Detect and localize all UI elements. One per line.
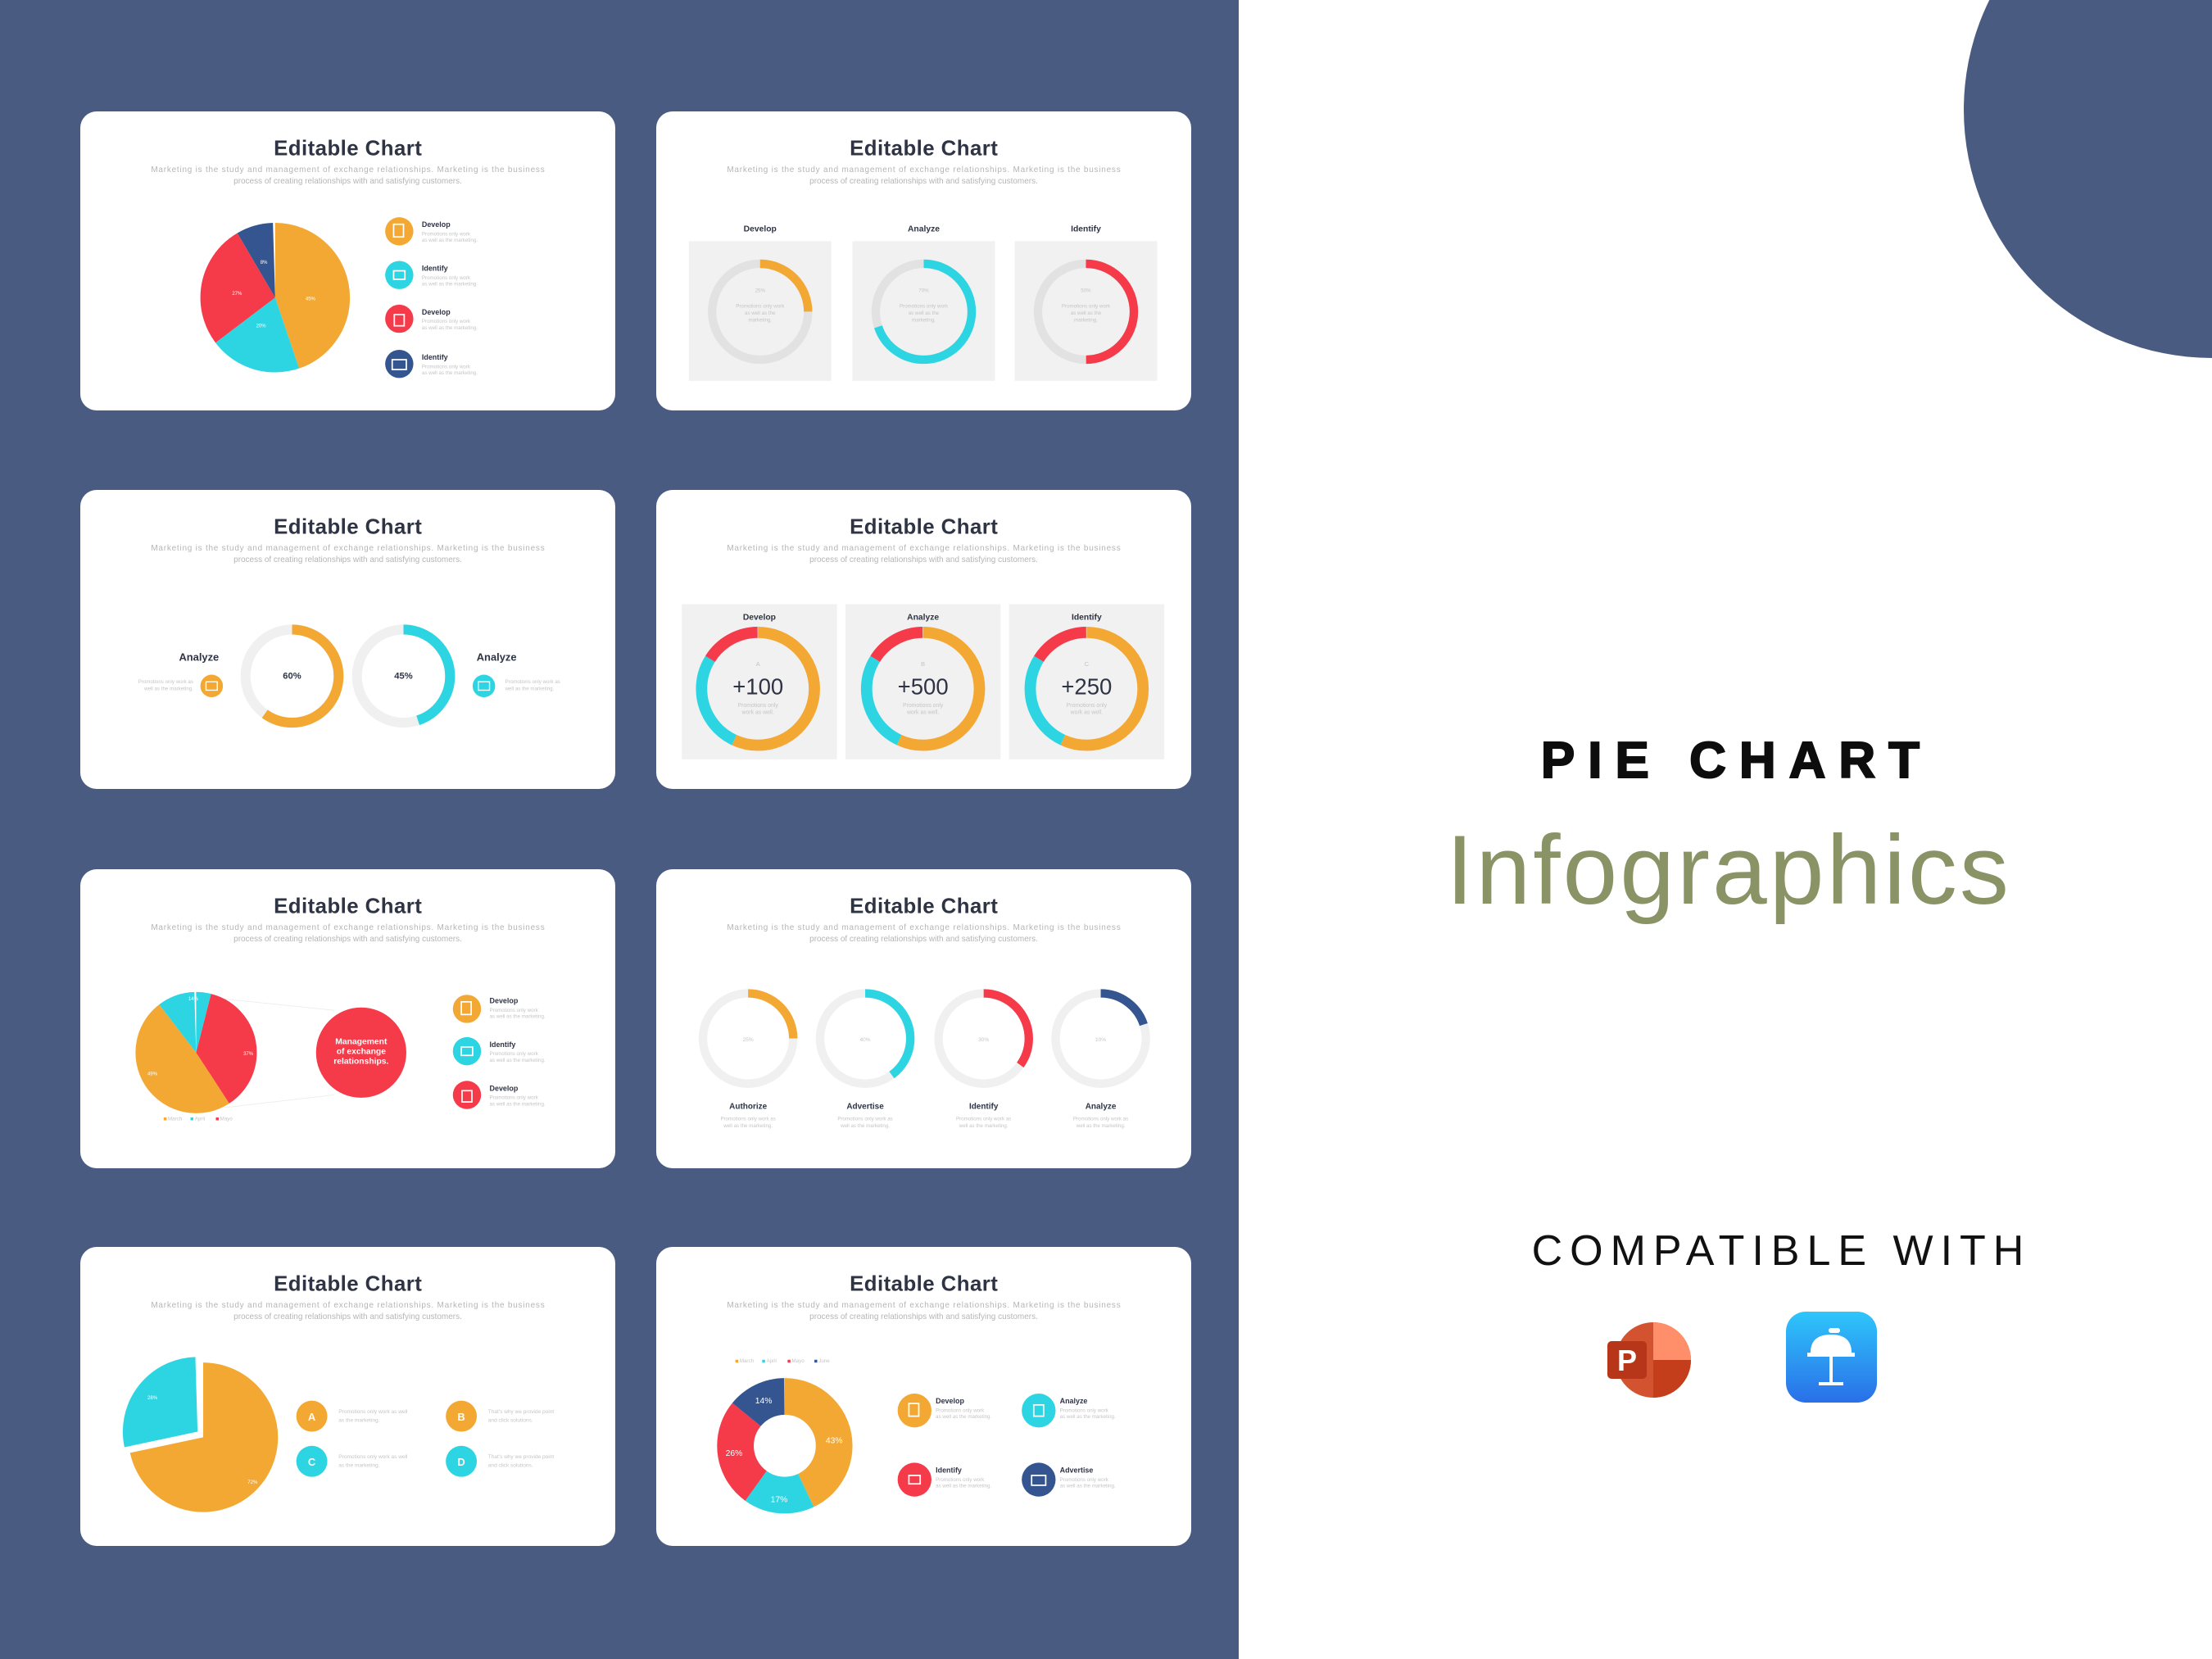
legend: Identify xyxy=(422,353,448,361)
card 5: pie with callout circle: 49% xyxy=(147,1072,158,1077)
legend: Promotions only work xyxy=(422,232,471,238)
card 8: donut with four legend items: 43% xyxy=(826,1436,843,1445)
card 1: pie chart with legend: 45% xyxy=(306,297,316,302)
card 5: pie with callout circle: Develop xyxy=(490,1084,519,1092)
card 6: four small donuts: Authorize xyxy=(729,1103,768,1112)
card 5: pie with callout circle: Promotions only work xyxy=(490,1095,539,1101)
card 2: three single-value donuts in grey boxes: Promotions only work xyxy=(736,303,785,309)
legend: Promotions only work xyxy=(422,275,471,281)
card 1: pie chart with legend: process of creating relationships with and satisfying customers. xyxy=(233,177,462,186)
card 5: pie with callout circle: Promotions only work xyxy=(490,1008,539,1013)
card 4: three multi-segment donuts with numbers: Identify xyxy=(1072,613,1102,622)
card 2: three single-value donuts in grey boxes: 50% xyxy=(1081,288,1091,293)
card 2: three single-value donuts in grey boxes: 70% xyxy=(918,288,929,293)
heading: PIE CHART: PIE CHART xyxy=(1541,732,1933,789)
card 7: exploded pie with A-D list: process of creating relationships with and satisfying customers. xyxy=(233,1312,462,1321)
card 8: donut with four legend items: 17% xyxy=(771,1496,787,1505)
card 5: pie with callout circle: 37% xyxy=(243,1052,254,1057)
card 8: donut with four legend items: as well as the marketing. xyxy=(1060,1484,1116,1489)
card 7: exploded pie with A-D list: That's why we provide point xyxy=(488,1454,554,1460)
card 3: two percentage donuts: 45% xyxy=(394,672,413,682)
card 8: donut with four legend items: as well as the marketing. xyxy=(936,1484,992,1489)
legend: as well as the marketing. xyxy=(422,238,478,243)
card 7: exploded pie with A-D list: A xyxy=(308,1411,315,1423)
card 8: donut with four legend items: March xyxy=(740,1358,755,1364)
card 6: four small donuts: 30% xyxy=(978,1037,989,1043)
card 6: four small donuts: Promotions only work as xyxy=(720,1116,776,1122)
card 3: two percentage donuts: Promotions only work as xyxy=(505,679,560,685)
card 8: donut with four legend items: process of creating relationships with and satisfying customers. xyxy=(809,1312,1038,1321)
card 7: exploded pie with A-D list: B xyxy=(457,1411,465,1423)
card 2: three single-value donuts in grey boxes: Analyze xyxy=(908,224,940,233)
card 5: pie with callout circle: April xyxy=(195,1116,205,1122)
card 5: pie with callout circle: Promotions only work xyxy=(490,1051,539,1057)
card 6: four small donuts: Promotions only work as xyxy=(837,1116,893,1122)
card 8: donut with four legend items: April xyxy=(767,1358,777,1364)
card 6: four small donuts: well as the marketing. xyxy=(959,1123,1009,1129)
card 5: pie with callout circle: March xyxy=(168,1116,183,1122)
card 1: pie chart with legend: 20% xyxy=(256,324,266,329)
legend: Identify xyxy=(422,265,448,273)
card 5: pie with callout circle xyxy=(80,869,615,1168)
card 2: three single-value donuts in grey boxes: marketing. xyxy=(1074,318,1098,324)
card 8: donut with four legend items: Promotions only work xyxy=(1060,1407,1109,1413)
legend: Promotions only work xyxy=(422,364,471,369)
icon: PowerPoint: P xyxy=(1617,1344,1637,1377)
card 8: donut with four legend items: Promotions only work xyxy=(1060,1477,1109,1483)
card 2: three single-value donuts in grey boxes: marketing. xyxy=(748,318,773,324)
card 2: three single-value donuts in grey boxes: Promotions only work xyxy=(1062,303,1111,309)
card 2: three single-value donuts in grey boxes: as well as the xyxy=(1071,310,1102,316)
card 5: pie with callout circle: as well as the marketing. xyxy=(490,1101,546,1107)
card 4: three multi-segment donuts with numbers: Promotions only xyxy=(738,703,778,709)
card 8: donut with four legend items: Advertise xyxy=(1060,1466,1093,1474)
card 5: pie with callout circle: Marketing is the study and management of exchange relationships. Marketing is the business xyxy=(151,923,545,932)
card 2: three single-value donuts in grey boxes: as well as the xyxy=(745,310,776,316)
card 8: donut with four legend items: Promotions only work xyxy=(936,1477,985,1483)
card 4: three multi-segment donuts with numbers: work as well. xyxy=(741,710,774,716)
card 4: three multi-segment donuts with numbers: Analyze xyxy=(907,613,939,622)
card 4: three multi-segment donuts with numbers: Marketing is the study and management of exchange relationships. Marketing is the business xyxy=(727,544,1121,553)
card 8: donut with four legend items: June xyxy=(818,1358,830,1364)
card 6: four small donuts: process of creating relationships with and satisfying customers. xyxy=(809,935,1038,944)
legend: as well as the marketing. xyxy=(422,370,478,376)
card 4: three multi-segment donuts with numbers: Develop xyxy=(743,613,776,622)
card 1: pie chart with legend: Editable Chart xyxy=(274,137,422,160)
card 5: pie with callout circle: process of creating relationships with and satisfying customers. xyxy=(233,935,462,944)
card 7: exploded pie with A-D list: and click solutions. xyxy=(488,1463,533,1469)
card 5: pie with callout circle: Develop xyxy=(490,997,519,1005)
card 6: four small donuts: 40% xyxy=(860,1037,871,1043)
card 5: pie with callout circle: of exchange xyxy=(337,1048,386,1057)
icon: PowerPoint xyxy=(1607,1322,1691,1398)
card 1: pie chart with legend: Marketing is the study and management of exchange relationships. Marketing is the business xyxy=(151,165,545,175)
card 6: four small donuts: well as the marketing. xyxy=(840,1123,890,1129)
card 4: three multi-segment donuts with numbers: A xyxy=(756,660,761,668)
card 2: three single-value donuts in grey boxes xyxy=(656,111,1191,410)
card 6: four small donuts xyxy=(656,869,1191,1168)
card 8: donut with four legend items: Marketing is the study and management of exchange relationships. Marketing is the business xyxy=(727,1301,1121,1310)
card 5: pie with callout circle: Editable Chart xyxy=(274,895,422,918)
card 1: pie chart with legend: 8% xyxy=(261,261,268,265)
card 4: three multi-segment donuts with numbers: C xyxy=(1085,660,1090,668)
decorative circle top-right xyxy=(1964,0,2212,358)
card 4: three multi-segment donuts with numbers: Editable Chart xyxy=(850,515,998,538)
card 4: three multi-segment donuts with numbers xyxy=(656,490,1191,789)
callout circle xyxy=(316,1008,406,1098)
card 6: four small donuts: Marketing is the study and management of exchange relationships. Marketing is the business xyxy=(727,923,1121,932)
card 8: donut with four legend items: Promotions only work xyxy=(936,1407,985,1413)
card 4: three multi-segment donuts with numbers: Promotions only xyxy=(1067,703,1108,709)
card 4: three multi-segment donuts with numbers: +500 xyxy=(898,674,949,700)
card 2: three single-value donuts in grey boxes: 25% xyxy=(755,288,765,293)
card 7: exploded pie with A-D list: Editable Chart xyxy=(274,1272,422,1295)
card 3: two percentage donuts: Promotions only work as xyxy=(138,679,193,685)
card 3: two percentage donuts: well as the marketing. xyxy=(143,686,193,691)
card 1: pie chart with legend xyxy=(80,111,615,410)
card 5: pie with callout circle: Identify xyxy=(490,1040,515,1049)
legend xyxy=(385,217,478,378)
card 4: three multi-segment donuts with numbers: +100 xyxy=(732,674,783,700)
card 3: two percentage donuts: Editable Chart xyxy=(274,515,422,538)
card 5: pie with callout circle: Management xyxy=(335,1037,388,1046)
card 7: exploded pie with A-D list xyxy=(80,1247,615,1546)
card 3: two percentage donuts: process of creating relationships with and satisfying customers. xyxy=(233,555,462,564)
card 2: three single-value donuts in grey boxes: marketing. xyxy=(912,318,936,324)
card 6: four small donuts: Identify xyxy=(969,1103,999,1112)
card 7: exploded pie with A-D list: as the marketing. xyxy=(338,1417,380,1423)
card 2: three single-value donuts in grey boxes: process of creating relationships with and satisfying customers. xyxy=(809,177,1038,186)
card 7: exploded pie with A-D list: Promotions only work as well xyxy=(338,1454,408,1460)
card 6: four small donuts: 10% xyxy=(1095,1037,1106,1043)
card 6: four small donuts: 25% xyxy=(743,1037,754,1043)
legend: Develop xyxy=(422,308,451,316)
icon: Keynote xyxy=(1786,1312,1877,1403)
card 8: donut with four legend items: 14% xyxy=(755,1397,772,1406)
card 4: three multi-segment donuts with numbers: process of creating relationships with and satisfying customers. xyxy=(809,555,1038,564)
card 5: pie with callout circle: as well as the marketing. xyxy=(490,1014,546,1020)
card 7: exploded pie with A-D list: 28% xyxy=(147,1396,158,1401)
legend: Promotions only work xyxy=(422,319,471,324)
card 5: pie with callout circle: Mayo xyxy=(220,1116,233,1122)
card 3: two percentage donuts: well as the marketing. xyxy=(504,686,555,691)
legend: as well as the marketing. xyxy=(422,325,478,331)
card 4: three multi-segment donuts with numbers: work as well. xyxy=(1070,710,1103,716)
subheading: Infographics: Infographics xyxy=(1446,815,2011,925)
card 5: pie with callout circle: as well as the marketing. xyxy=(490,1058,546,1063)
pie xyxy=(238,261,312,335)
card 4: three multi-segment donuts with numbers: work as well. xyxy=(906,710,939,716)
card 4: three multi-segment donuts with numbers: Promotions only xyxy=(903,703,944,709)
card 8: donut with four legend items: as well as the marketing. xyxy=(936,1414,992,1420)
card 7: exploded pie with A-D list: as the marketing. xyxy=(338,1463,380,1469)
card 4: three multi-segment donuts with numbers: +250 xyxy=(1061,674,1112,700)
legend: Develop xyxy=(422,220,451,229)
card 2: three single-value donuts in grey boxes: Develop xyxy=(744,224,777,233)
card 7: exploded pie with A-D list: That's why we provide point xyxy=(488,1409,554,1415)
card 6: four small donuts: well as the marketing. xyxy=(723,1123,773,1129)
text: COMPATIBLE WITH: COMPATIBLE WITH xyxy=(1532,1227,2031,1275)
card 6: four small donuts: Promotions only work as xyxy=(1073,1116,1128,1122)
card 8: donut with four legend items: Mayo xyxy=(792,1358,805,1364)
card 7: exploded pie with A-D list: Marketing is the study and management of exchange relationships. Marketing is the business xyxy=(151,1301,545,1310)
card 8: donut with four legend items xyxy=(656,1247,1191,1546)
card 3: two percentage donuts: 60% xyxy=(283,672,301,682)
card 6: four small donuts: Advertise xyxy=(846,1103,884,1112)
card 1: pie chart with legend: 27% xyxy=(232,292,243,297)
card 8: donut with four legend items: Analyze xyxy=(1060,1397,1087,1405)
card 6: four small donuts: well as the marketing. xyxy=(1076,1123,1126,1129)
card 7: exploded pie with A-D list: D xyxy=(457,1456,465,1468)
card 2: three single-value donuts in grey boxes: Editable Chart xyxy=(850,137,998,160)
card 7: exploded pie with A-D list: and click solutions. xyxy=(488,1417,533,1423)
card 2: three single-value donuts in grey boxes: Identify xyxy=(1071,224,1101,233)
card 6: four small donuts: Promotions only work as xyxy=(956,1116,1011,1122)
card 5: pie with callout circle: relationships. xyxy=(333,1058,389,1067)
card 8: donut with four legend items: as well as the marketing. xyxy=(1060,1414,1116,1420)
legend: as well as the marketing. xyxy=(422,282,478,288)
card 3: two percentage donuts: Analyze xyxy=(179,650,219,663)
card 7: exploded pie with A-D list: C xyxy=(308,1456,315,1468)
card 3: two percentage donuts: Marketing is the study and management of exchange relationships. Marketing is the business xyxy=(151,544,545,553)
card 6: four small donuts: Editable Chart xyxy=(850,895,998,918)
card 3: two percentage donuts xyxy=(80,490,615,789)
card 7: exploded pie with A-D list: Promotions only work as well xyxy=(338,1409,408,1415)
left background panel xyxy=(0,0,1239,1659)
card 8: donut with four legend items: Editable Chart xyxy=(850,1272,998,1295)
card 6: four small donuts: Analyze xyxy=(1086,1103,1117,1112)
card 2: three single-value donuts in grey boxes: as well as the xyxy=(909,310,940,316)
card 2: three single-value donuts in grey boxes: Marketing is the study and management of exchange relationships. Marketing is the business xyxy=(727,165,1121,175)
card 8: donut with four legend items: Develop xyxy=(936,1397,964,1405)
card 4: three multi-segment donuts with numbers: B xyxy=(921,660,925,668)
card 8: donut with four legend items: Identify xyxy=(936,1466,962,1474)
card 2: three single-value donuts in grey boxes: Promotions only work xyxy=(900,303,949,309)
card 5: pie with callout circle: 14% xyxy=(188,997,199,1002)
card 3: two percentage donuts: Analyze xyxy=(477,650,517,663)
card 7: exploded pie with A-D list: 72% xyxy=(247,1480,258,1485)
card 8: donut with four legend items: 26% xyxy=(726,1449,742,1458)
